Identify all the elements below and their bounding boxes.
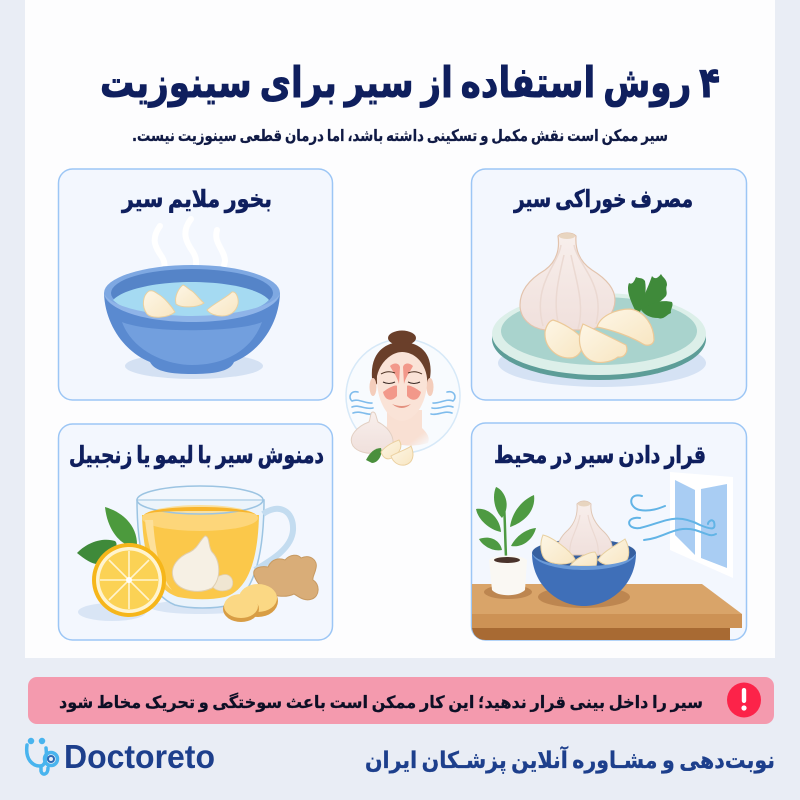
icon: bowl of garlic [532,501,636,608]
panel: main white sheet [25,0,775,658]
heading: room: قرار دادن سیر در محیط [494,441,706,469]
subtitle: سیر ممکن است نقش مکمل و تسکینی داشته باشد، اما درمان قطعی سینوزیت نیست. [132,126,668,145]
icon: exclamation [727,682,761,718]
icon: central sinus face with garlic [346,330,460,465]
panel: steam inhalation [58,169,332,400]
icon: bowl of hot water with garlic [104,265,280,379]
icon: potted plant [476,487,536,599]
heading: eating: مصرف خوراکی سیر [513,185,693,213]
panel: tea [58,424,332,640]
wordmark: Doctoreto [64,738,215,775]
panel: eating garlic [472,169,746,400]
icon: open window with wind [629,472,733,578]
callout: warning banner [28,677,774,724]
icon: stethoscope [27,740,58,774]
icon: steam wisps [155,219,225,281]
warning text: سیر را داخل بینی قرار ندهید؛ این کار ممکن است باعث سوختگی و تحریک مخاط شود [59,692,703,713]
logo: Doctoreto [27,738,215,775]
icon: wooden table [472,584,742,640]
heading: steam: بخور ملایم سیر [121,185,272,213]
heading: tea: دمنوش سیر با لیمو یا زنجبیل [69,441,324,469]
panel: room placement [472,423,746,640]
icon: tea cup with garlic, lemon and ginger [77,486,318,622]
icon: plate with garlic and parsley [492,233,706,387]
